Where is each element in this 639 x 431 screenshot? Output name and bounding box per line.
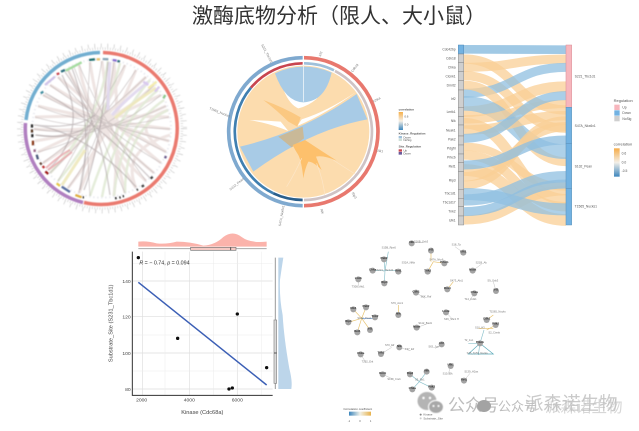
correlation annotation: R = − 0.74, p = 0.094 [139,260,190,266]
node gene names: Dmrt [444,286,451,290]
right labels: S221_Tbc1d1 [575,75,596,79]
sector labels: Nlk [319,208,325,215]
axis tick labels: 100 [122,351,131,357]
network labels: S133_Creb [387,377,401,381]
network colour legend: 1 [370,419,372,423]
left column [458,45,464,225]
outer tick marks [19,46,185,212]
left labels: Cdk18 [446,56,456,60]
left labels: Tbc1d1 [445,192,456,196]
node gene names: Pak2 [363,304,370,308]
network colour legend: 0 [359,419,361,423]
network labels: S102_Pean [357,316,372,320]
network labels: S9_Gsk3 [487,278,499,282]
node gene names: Rip3 [407,371,414,375]
legend: Site_Regulation [399,145,421,149]
axes [132,252,273,395]
left labels: Pdgfrl [447,146,456,150]
left labels: Ulk1 [449,218,456,222]
chords [34,61,170,197]
network labels: S32A_Nfkb [402,260,416,264]
node gene names: Dmrt [379,371,386,375]
legend: NoSig [403,138,412,142]
network labels: S139_H2ax [464,370,479,374]
node gene names: Tnk2 [372,314,379,318]
network colour legend: Correlation coefficient [343,407,372,411]
right column [566,45,572,225]
watermark text: 公众号 [448,396,499,415]
legend: Down [403,152,411,156]
top density [138,233,267,250]
node gene names: Ret1 [354,329,361,333]
left labels: Tbc1d17 [443,200,456,204]
node gene names: Chka [357,351,365,355]
network labels [352,240,506,382]
network labels: T308_Akt1 [352,284,365,288]
node gene names: Rip3 [381,280,388,284]
network labels: S47A_Nkx6 [429,258,444,262]
left labels: Pak2 [448,137,456,141]
node gene names: Nlk [409,240,414,244]
node gene names: Chka [409,386,416,390]
network labels: S10_Elk [443,371,453,375]
node gene names: Pak2 [381,256,388,260]
node gene names: Irf2 [368,327,373,331]
watermark text [448,393,623,416]
network labels: S15_Tp53_Nucks [467,351,488,355]
network labels: S10_H3 [475,325,485,329]
correlation legend: correlation [614,141,632,146]
node gene names [345,240,499,390]
node gene names: Nlk [396,312,401,316]
node gene names: Pak2 [492,322,499,326]
node gene names: Ulk1 [447,363,454,367]
sector labels [209,43,384,227]
inner coloured track [32,59,171,198]
right labels: S102_Pean [575,165,592,169]
legend: correlation [399,107,414,111]
regulation legend: NoSig [622,117,632,121]
left labels: Prkcb [447,155,456,159]
axis tick labels: 4000 [184,397,195,403]
legend: Down [403,135,411,139]
node gene names: Ulk1 [460,249,467,253]
network labels: S6K_Raf [421,295,432,299]
node gene names: Cdk1 [483,317,491,321]
correlation legend: 0.0 [622,160,626,164]
right labels: T1565_Nucks1 [575,205,597,209]
right labels [575,75,597,209]
node gene names: Tnk2 [378,351,385,355]
left labels: Chka [448,65,456,69]
sector labels: S102_Pean [229,177,245,191]
node type legend [420,413,443,420]
node gene names: Nuak [469,267,477,271]
axis tick labels: 80 [125,387,131,393]
axis tick labels: 6000 [232,397,243,403]
left labels: Clcnk1 [445,74,456,78]
network colour legend [343,407,372,423]
network edges [348,243,496,389]
grid [132,252,273,395]
outer ring [229,58,378,206]
regulation legend: Regulation [614,98,633,103]
network colour legend: -1 [348,419,351,423]
outer sector ring [25,52,177,204]
chord fill [237,66,369,198]
sector labels: S47A_Nkx6x1 [278,205,286,227]
node gene names: Lmtk [442,309,450,313]
correlation legend [614,141,632,177]
legend: 0.0 [404,122,409,126]
legend: Up [403,149,407,153]
node gene names: Nlk [424,368,429,372]
network labels: T202_Erk [362,360,374,364]
node gene names: Prkcb [476,340,484,344]
network labels: T14_Cdk1 [464,297,477,301]
node gene names: Cdk1 [412,289,420,293]
regression line [138,282,267,385]
panel: network graph [343,240,506,423]
regulation legend [614,98,633,121]
left labels: Nuak1 [446,128,456,132]
right density [274,258,292,389]
node gene names: Irf2 [439,341,444,345]
node type legend: Substrate_Site [423,416,443,420]
node gene names: Nuak [413,324,421,328]
axis tick labels: 140 [122,279,131,285]
network labels: S21B_Ak [476,260,487,264]
axis tick labels [122,279,243,403]
sector labels: Irf2 [318,51,323,57]
sector labels: S221_Tbc1d1 [260,43,274,64]
network labels: S16B_Gsk3 [414,240,429,244]
left labels: Ret1 [449,164,456,168]
node gene names: Pak2 [428,384,435,388]
network labels: T2_Jun [464,338,474,342]
node gene names: Chka [471,290,478,294]
sector labels: Chka [372,96,381,103]
watermark: WeChat icon [418,392,444,414]
left labels [442,48,456,222]
node gene names: Chka [369,267,377,271]
correlation legend: 0.6 [622,152,626,156]
node gene names: Tnk2 [424,268,431,272]
node gene names: Lmtk [355,276,362,280]
sector labels: T1565_Nucks1 [209,106,231,118]
panel: kinase-substrate chord diagram [209,43,426,227]
network labels: S36_Shc1 H [444,317,459,321]
network nodes [345,240,499,392]
inner ring [235,63,372,200]
network labels: S112_Bad1 [418,321,433,325]
network labels: S79_Acc1 [391,301,404,305]
sector labels: Cdk18 [350,63,359,73]
flow bands [464,49,566,220]
network labels: S18_Tp [452,242,461,246]
y axis title: Substrate_Site (S231_Tbc1d1) [109,284,115,362]
left labels: Dmrt2 [447,83,456,87]
network labels: S15B_Rps6 [382,245,396,249]
right labels: S47A_Nkx6x1 [575,124,596,128]
panel: scatter plot with marginals [109,233,292,416]
left labels: Tnk2 [448,209,456,213]
regulation legend: Up [622,106,627,110]
axis tick labels: 2000 [136,397,147,403]
left labels: Rip3 [449,178,456,182]
network labels: S2_Ctnnb [488,330,501,334]
node type legend: Kinase [423,413,433,417]
network labels: S221_Tbc1d1 [377,268,394,272]
network labels: S70_Eif [385,343,395,347]
left labels: Irf2 [451,97,456,101]
legend: Kinase_Regulation [399,132,426,136]
node gene names: Irf2 [429,247,434,251]
network labels: T37_Eif [405,347,414,351]
watermark text: 派森诺生物 [525,393,618,414]
sector labels: Rip3 [351,192,358,200]
data points [137,256,268,391]
left labels: Nlk [451,119,456,123]
watermark text: 公众号 [498,399,537,414]
correlation legend: -0.5 [622,169,628,173]
left labels: Lmtk1 [447,110,456,114]
sector labels: Ulk1 [376,148,384,154]
panel: circos chord diagram [19,46,185,212]
left labels: Cdc42bp [442,48,456,52]
node gene names: Ulk1 [350,306,357,310]
legend: 0.6 [404,114,409,118]
legend [399,107,426,156]
node gene names: Ret1 [395,268,402,272]
x axis title: Kinase (Cdc68a) [181,410,223,416]
watermark text: 派森诺生物 [545,398,623,416]
node gene names: Prkcb [440,260,449,264]
network labels: S473_Akt1 [450,279,464,283]
network labels: S63_Jun [428,345,439,349]
title: 激酶底物分析（限人、大小鼠） [192,5,486,28]
network labels: T1565_Nucks [489,309,506,313]
node gene names: Nlk [397,344,402,348]
panel: sankey diagram [442,45,633,225]
node gene names: Irf2 [494,288,499,292]
axis tick labels: 120 [122,315,131,321]
node gene names: Ret1 [461,377,468,381]
network labels: S5_Rb1 [415,378,425,382]
regulation legend: Down [622,111,631,115]
node gene names: Rip3 [345,319,352,323]
